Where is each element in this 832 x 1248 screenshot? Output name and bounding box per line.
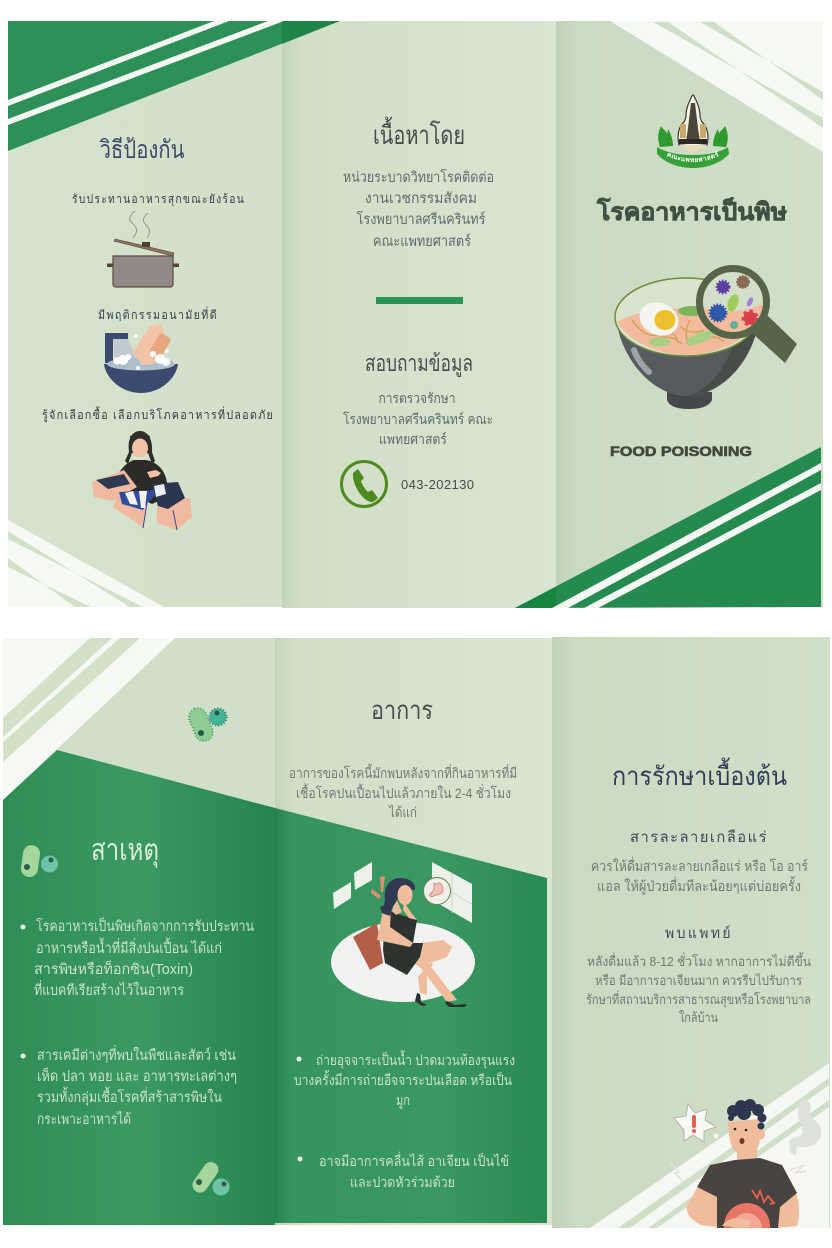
bullet: symptom two: และปวดหัวร่วมด้วย xyxy=(350,1174,455,1190)
panel: prevention xyxy=(8,21,340,607)
bullet: cause two xyxy=(20,1045,237,1128)
divider bar xyxy=(376,297,463,304)
bullet: cause one xyxy=(20,916,254,999)
illustration: girl with food boxes xyxy=(92,431,192,530)
bullet: symptom two xyxy=(298,1152,509,1190)
white corner with stripes xyxy=(8,520,164,607)
top brochure xyxy=(8,21,823,608)
text: choose safe food: รู้จักเลือกซื้อ เลือกบริโภคอาหารที่ปลอดภัย xyxy=(42,406,274,423)
bottom brochure xyxy=(3,637,830,1248)
bullet: cause one: ที่แบคทีเรียสร้างไว้ในอาหาร xyxy=(34,980,184,999)
text: eat hot food: รับประทานอาหารสุกขณะยังร้อน xyxy=(72,192,245,207)
subheading: see a doctor: พบแพทย์ xyxy=(665,925,733,942)
icon: grey stomach xyxy=(789,1100,821,1155)
text: symptoms intro: ได้แก่ xyxy=(388,805,417,820)
icon: pills bacteria xyxy=(20,844,58,878)
white corner with stripes xyxy=(590,1063,829,1228)
text: contact lines xyxy=(343,390,493,447)
green background shape xyxy=(3,750,275,1225)
text: symptoms intro: อาการของโรคนี้มักพบหลังจากที่กินอาหารที่มี xyxy=(289,763,517,781)
subheading: oral salts: สารละลายเกลือแร่ xyxy=(630,829,768,846)
heading: causes: สาเหตุ xyxy=(91,834,159,869)
text: department lines xyxy=(343,168,494,250)
text: doctor advice xyxy=(586,952,811,1025)
text: department lines: งานเวชกรรมสังคม xyxy=(365,191,477,207)
text: doctor advice: หรือ มีอาการอาเจียนมาก ควรรีบไปรับการ xyxy=(595,973,802,988)
text: phone number: 043-202130 xyxy=(401,477,474,492)
text: department lines: โรงพยาบาลศรีนครินทร์ xyxy=(356,210,486,228)
bullet: symptom two: อาจมีอาการคลื่นไส้ อาเจียน เป็นไข้ xyxy=(319,1152,509,1169)
english title: FOOD POISONING xyxy=(610,444,752,459)
panel: cover xyxy=(515,21,823,608)
logo: faculty of medicine xyxy=(657,94,729,168)
green corner banner with white stripes xyxy=(515,447,821,608)
bullet: cause two: รวมทั้งกลุ่มเชื้อโรคที่สร้าสารพิษใน xyxy=(37,1086,222,1106)
green corner banner with white stripes xyxy=(8,21,340,151)
icon: pills bacteria lower xyxy=(190,1159,230,1196)
text: department lines: หน่วยระบาดวิทยาโรคติดต่อ xyxy=(343,168,494,186)
icon: cooking pot xyxy=(107,211,179,287)
text: department lines: คณะแพทยศาสตร์ xyxy=(373,233,471,250)
text: contact lines: แพทยศาสตร์ xyxy=(379,431,447,447)
bullet: cause two: สารเคมีต่างๆที่พบในพืชและสัตว์ เช่น xyxy=(37,1045,236,1064)
icon: alert burst xyxy=(674,1104,718,1142)
illustration: man with stomach pain xyxy=(670,1099,806,1228)
text: contact lines: การตรวจรักษา xyxy=(378,390,456,406)
bullet: cause one: โรคอาหารเป็นพิษเกิดจากการรับประทาน xyxy=(36,916,254,935)
heading: enquiries: สอบถามข้อมูล xyxy=(365,350,473,377)
text: oral salts advice xyxy=(591,857,808,895)
bullet: symptom one: ถ่ายอุจจาระเป็นน้ำ ปวดมวนท้องรุนแรง xyxy=(316,1050,515,1069)
text: symptoms intro: เชื้อโรคปนเปื้อนไปแล้วภายใน 2-4 ชั่วโมง xyxy=(296,783,511,801)
panel: content by xyxy=(282,21,556,608)
text: symptoms intro xyxy=(289,763,517,820)
title: โรคอาหารเป็นพิษ xyxy=(596,197,787,226)
illustration: noodle bowl and magnifier xyxy=(615,268,797,409)
text: hygiene: มีพฤติกรรมอนามัยที่ดี xyxy=(98,306,218,322)
icon: green bacteria xyxy=(186,705,226,744)
bullet: cause one: สารพิษหรือท็อกซิน(Toxin) xyxy=(34,959,193,978)
bullet: symptom one: บางครั้งมีการถ่ายอีจจาระปนเลือด หรือเป็น xyxy=(294,1070,512,1088)
bullet: cause two: เห็ด ปลา หอย และ อาหารทะเลต่างๆ xyxy=(37,1066,237,1085)
green background shape xyxy=(275,808,547,1223)
heading: prevention: วิธีป้องกัน xyxy=(100,136,184,164)
heading: symptoms: อาการ xyxy=(371,695,433,725)
white corner with stripes xyxy=(610,21,823,152)
heading: content by: เนื้อหาโดย xyxy=(373,116,465,150)
text: doctor advice: หลังดื่มแล้ว 8-12 ชั่วโมง หากอาการไม่ดีขึ้น xyxy=(587,952,811,969)
text: contact lines: โรงพยาบาลศรีนครินทร์ คณะ xyxy=(343,411,493,427)
heading: first aid: การรักษาเบื้องต้น xyxy=(612,757,787,791)
icon: phone xyxy=(342,462,386,506)
text: oral salts advice: แอล ให้ผู้ป่วยดื่มทีละน้อยๆแต่บ่อยครั้ง xyxy=(597,876,801,895)
icon: hand washing bowl xyxy=(104,324,178,393)
bullet: cause two: กระเพาะอาหารได้ xyxy=(37,1110,131,1128)
white corner with stripes xyxy=(3,638,175,800)
panel: causes xyxy=(3,638,275,1225)
logo: faculty of medicine: คณะแพทยศาสตร์ xyxy=(667,150,718,162)
bullet: symptom one xyxy=(294,1050,515,1109)
illustration: woman with stomach ache xyxy=(331,862,475,1007)
text: oral salts advice: ควรให้ดื่มสารละลายเกลือแร่ หรือ โอ อาร์ xyxy=(591,857,808,874)
text: doctor advice: ใกล้บ้าน xyxy=(679,1010,718,1025)
panel: first aid xyxy=(552,637,830,1248)
bullet: cause one: อาหารหรือน้ำที่มีสิ่งปนเปื้อน ได้แก่ xyxy=(36,937,222,957)
panel: symptoms xyxy=(275,638,552,1225)
bullet: symptom one: มูก xyxy=(396,1092,410,1109)
